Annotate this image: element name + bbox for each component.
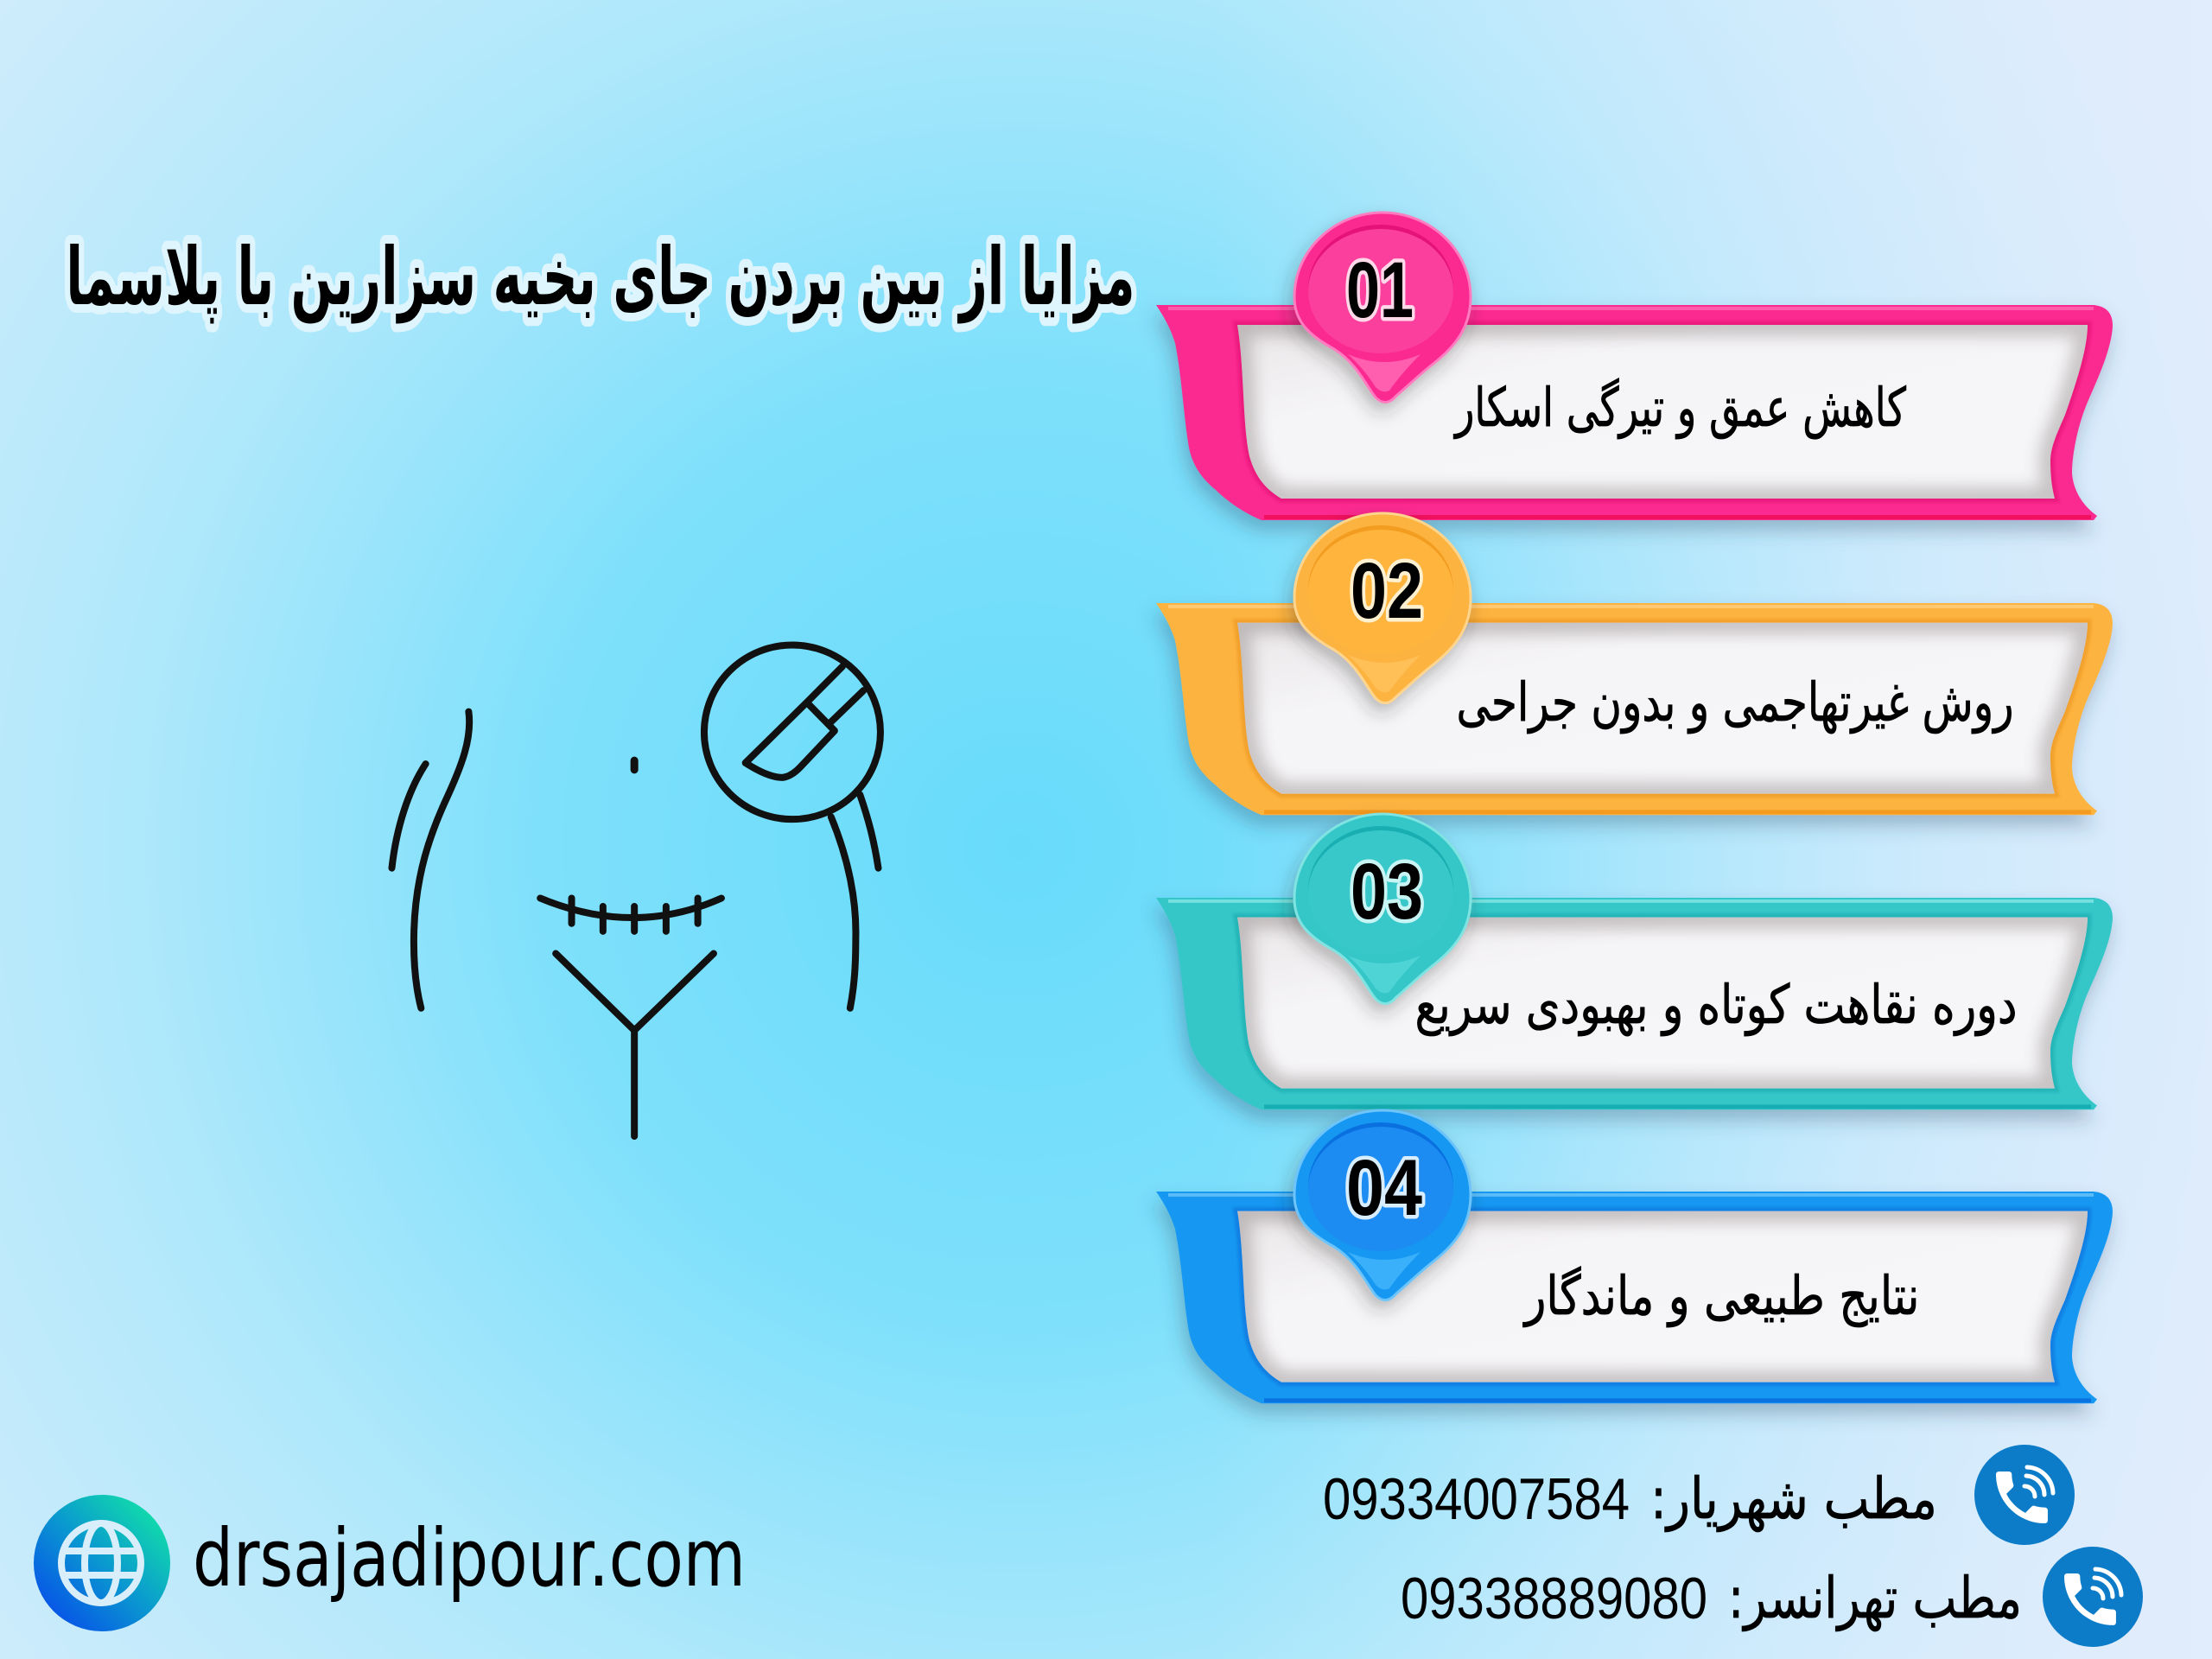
benefit text 3: دوره نقاهت کوتاه و بهبودی سریع [1415,973,2017,1037]
content area 1 [1237,325,2088,499]
scalpel [746,666,863,778]
title: مزایا از بین بردن جای بخیه سزارین با پلاسما [66,231,1135,324]
groin lines [556,954,714,1136]
phone number line 2 [1401,1565,2022,1631]
benefit text 4: نتایج طبیعی و ماندگار [1522,1264,1920,1327]
pin 02 [1294,513,1471,703]
stitched incision [540,898,721,931]
website address: drsajadipour.com [193,1512,746,1605]
content area 4 [1237,1211,2088,1382]
phone number line 1 [1323,1465,1937,1532]
clinic name 1: مطب شهریار: [1650,1465,1937,1532]
benefit text 2: روش غیرتهاجمی و بدون جراحی [1457,671,2013,734]
number 01: 01 [1346,246,1414,334]
pin 01 [1294,213,1471,403]
frame 3 [1156,898,2113,1109]
right small contour [860,795,878,868]
left small contour [391,764,426,868]
number 04: 04 [1346,1144,1422,1232]
icon: phone 2 [2043,1547,2143,1647]
icon: phone 1 [1974,1445,2075,1545]
number 2: 09338889080 [1401,1566,1707,1631]
navel [631,760,639,770]
panel 1 [1156,305,2113,520]
scalpel circle [704,645,880,819]
frame 2 [1156,603,2113,815]
number 03: 03 [1351,848,1423,936]
content area 3 [1237,918,2088,1089]
panel 4 [1156,1192,2113,1403]
pin 03 [1294,814,1471,1004]
benefit text 1: کاهش عمق و تیرگی اسکار [1453,376,1906,439]
clinic name 2: مطب تهرانسر: [1728,1565,2022,1631]
number 1: 09334007584 [1323,1466,1630,1532]
frame 1 [1156,305,2113,520]
left body contour [414,712,469,1008]
frame 4 [1156,1192,2113,1403]
panel 3 [1156,898,2113,1109]
pin 04 [1294,1110,1471,1300]
content area 2 [1237,623,2088,794]
number 02: 02 [1351,547,1423,635]
icon: globe [34,1495,170,1631]
illustration: abdomen with stitched incision and scalpel [391,645,880,1136]
right body contour [831,817,855,1008]
panel 2 [1156,603,2113,815]
